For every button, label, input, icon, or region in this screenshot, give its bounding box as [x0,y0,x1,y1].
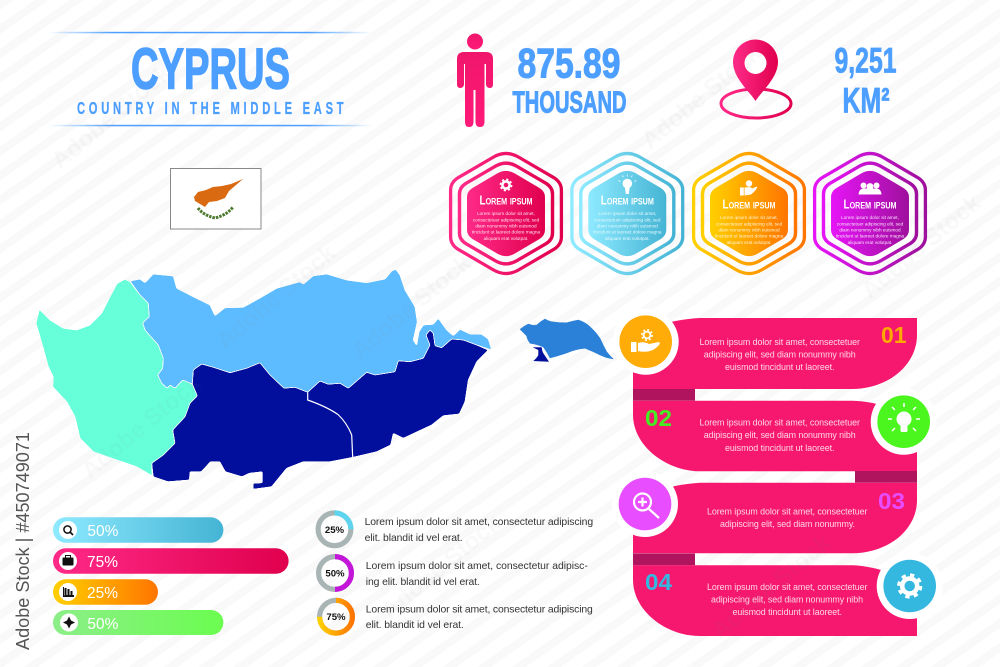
stat bar: 75% pink [53,548,289,574]
number: 01 [881,322,906,348]
donut text 2: ing elit. blandit id vel erat. [366,577,480,588]
step text: euismod tincidunt ut laoreet. [725,362,834,372]
card text [593,194,662,241]
step text: adipiscing elit, sed diam nonummy nibh [711,594,863,604]
step text [707,506,868,529]
card text: tincidunt ut laoreet dolore magna [472,230,541,234]
card text: Lorem ipsum dolor sit amet, [720,215,778,220]
card text: Lorem ipsum dolor sit amet, [598,211,656,216]
panel: step 3 [612,471,917,565]
map of Cyprus [36,269,492,489]
watermark: Adobe Stock [47,59,177,175]
card text: aliquam erat volutpat. [848,240,892,245]
card text: Lorem ipsum [480,194,532,208]
donut text 3: Lorem ipsum dolor sit amet, consectetur adipiscing [366,604,593,616]
number: 04 [645,569,672,595]
area icon: location pin [721,40,791,118]
donut: 50% [319,557,351,589]
panel: step 4 [633,553,943,636]
card text: Lorem ipsum dolor sit amet, [477,211,535,216]
side credit text: Adobe Stock | #450749071 [13,432,33,650]
step text [700,337,860,372]
watermark: Adobe Stock [707,529,837,645]
card text: diam nonummy nibh euismod [597,223,658,228]
heading: Cyprus: CYPRUS [131,38,290,102]
card text [715,198,784,245]
title block [48,32,373,126]
donut text 3 [366,604,593,631]
subtitle: COUNTRY IN THE MIDDLE EAST [77,98,344,119]
step text: adipiscing elit, sed diam nonummy. [720,519,855,529]
watermark: Adobe Stock [857,189,987,305]
donut: 75% [320,600,352,633]
step text: Lorem ipsum dolor sit amet, consectetuer [700,418,860,428]
area figure [834,42,896,120]
icon: gear [500,179,512,191]
card text: diam nonummy nibh euismod [718,227,780,232]
region: west [36,279,197,476]
population figure: THOUSAND [512,84,626,120]
donut text 2 [366,561,588,588]
card text: aliquam erat volutpat. [484,236,528,241]
number: 02 [645,405,672,431]
card text: consectetuer adipiscing elit, sed [716,221,783,226]
card text: tincidunt ut laoreet dolore magna [836,234,905,238]
donut: 75%: 75% [326,612,346,623]
step text: adipiscing elit, sed diam nonummy nibh [704,350,856,360]
step text: adipiscing elit, sed diam nonummy nibh [704,430,856,440]
stat bar: 25% orange [53,579,158,605]
card text: consectetuer adipiscing elit, sed [473,217,540,222]
hexagon card 2 [572,153,683,274]
stat bar: 75% pink: 75% [87,554,118,571]
hexagon card 4 [815,153,925,274]
card text: tincidunt ut laoreet dolore magna [593,230,662,234]
donut: 25% [318,513,351,546]
stat bar: 50% cyan [53,517,223,543]
map: eastern island [520,319,613,362]
card text: Lorem ipsum [722,198,776,212]
population icon: person [457,34,493,127]
watermark: Adobe Stock [377,509,507,625]
icon: bulb [618,174,636,194]
icon: gear [883,560,936,612]
donut text 1: elit. blandit id vel erat. [365,533,463,544]
watermark: Adobe Stock [637,39,767,155]
step text: Lorem ipsum dolor sit amet, consectetuer [700,337,860,347]
flag of Cyprus [170,168,261,229]
panel: step 2 [633,389,937,483]
card text: diam nonummy nibh euismod [839,227,901,232]
card text: aliquam erat volutpat. [605,236,650,241]
step text: Lorem ipsum dolor sit amet, consectetuer [707,506,868,516]
step text: euismod tincidunt ut laoreet. [725,443,834,453]
donut text 1: Lorem ipsum dolor sit amet, consectetur adipiscing [365,517,593,528]
icon: people [858,182,882,194]
card text: aliquam erat volutpat. [727,240,771,245]
icon: bulb [877,395,930,448]
donut: 25%: 25% [325,525,345,536]
card text: Lorem ipsum [601,194,654,208]
icon: magnifier [619,478,671,530]
card text [472,194,541,241]
card text: consectetuer adipiscing elit, sed [837,221,904,226]
hexagon card 3 [694,153,804,274]
stat bar: 50% green: 50% [87,616,119,633]
stat bar: 25% orange: 25% [87,585,118,602]
card text: Lorem ipsum dolor sit amet, [841,215,899,220]
step text [707,582,868,617]
card text: diam nonummy nibh euismod [475,223,537,228]
panel: step 1 [613,309,917,401]
region: north [130,269,492,392]
step text [700,418,860,453]
donut text 2: Lorem ipsum dolor sit amet, consectetur adipisc- [366,561,588,572]
area figure: 9,251 [834,42,896,80]
card text: Lorem ipsum [844,198,896,212]
watermark: Adobe Stock [77,369,207,485]
card text [836,198,905,245]
step text: euismod tincidunt ut laoreet. [732,607,842,617]
stat bar: 50% green [53,610,223,635]
icon: hand with person [740,180,757,196]
donut: 50%: 50% [325,568,345,580]
card text: consectetuer adipiscing elit, sed [594,217,661,222]
number: 03 [878,488,905,514]
card text: tincidunt ut laoreet dolore magna [715,234,784,238]
population figure [512,40,626,120]
donut text 1 [365,517,593,544]
hexagon card 1 [451,153,561,274]
area figure: KM² [842,82,890,120]
population figure: 875.89 [518,40,620,86]
icon: hand with gear [619,315,672,368]
step text: Lorem ipsum dolor sit amet, consectetuer [707,582,868,592]
watermark: Adobe Stock [212,239,342,355]
region: south [152,330,488,489]
watermark: Adobe Stock [347,249,477,365]
stat bar: 50% cyan: 50% [87,523,119,540]
donut text 3: elit. blandit id vel erat. [366,620,464,631]
